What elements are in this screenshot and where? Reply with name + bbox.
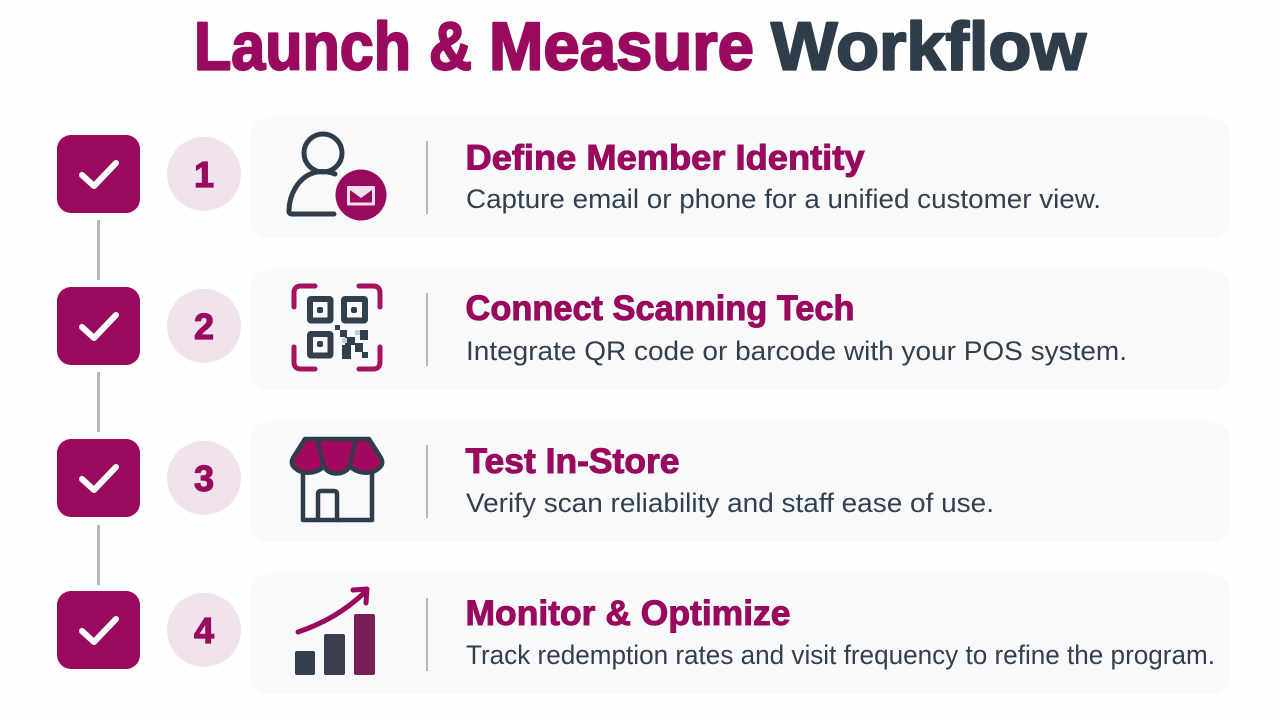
number badge 3: 3 [194,458,214,499]
number badge 1: 1 [194,154,214,195]
icon: member with email [289,134,386,220]
icon: QR code [294,286,380,369]
connector 2-3 [97,372,100,432]
description 4: Track redemption rates and visit frequency to refine the program. [466,640,1215,670]
title: Launch [194,8,411,84]
connector 3-4 [97,525,100,585]
panel: step 4 card [250,573,1230,694]
checkbox 4 [57,591,140,669]
panel: step 2 card [250,269,1230,390]
checkbox 2 [57,287,140,365]
title [194,8,1087,84]
icon: growth chart [295,589,375,675]
step 2 [57,269,1230,390]
heading 3: Test In-Store [466,441,680,481]
number badge 4: 4 [194,610,214,651]
title: Workflow [771,8,1087,84]
checkbox 3 [57,439,140,517]
title: & [429,8,472,84]
heading 4: Monitor & Optimize [466,593,790,633]
step 4 [57,573,1230,694]
number badge 3 [167,441,241,515]
number badge 4 [167,593,241,667]
number badge 1 [167,137,241,211]
divider [426,445,428,518]
title: Measure [489,8,754,84]
number badge 2 [167,289,241,363]
description 2: Integrate QR code or barcode with your POS system. [466,336,1127,366]
description 3: Verify scan reliability and staff ease of use. [466,488,994,518]
divider [426,598,428,671]
panel: step 1 card [250,117,1230,238]
step 1 [57,117,1230,238]
step 3 [57,421,1230,542]
panel: step 3 card [250,421,1230,542]
divider [426,293,428,366]
checkbox 1 [57,135,140,213]
heading 2: Connect Scanning Tech [466,288,854,328]
divider [426,141,428,214]
number badge 2: 2 [194,306,214,347]
icon: storefront [292,439,382,520]
heading 1: Define Member Identity [466,138,865,178]
connector 1-2 [97,220,100,280]
description 1: Capture email or phone for a unified customer view. [466,184,1101,214]
